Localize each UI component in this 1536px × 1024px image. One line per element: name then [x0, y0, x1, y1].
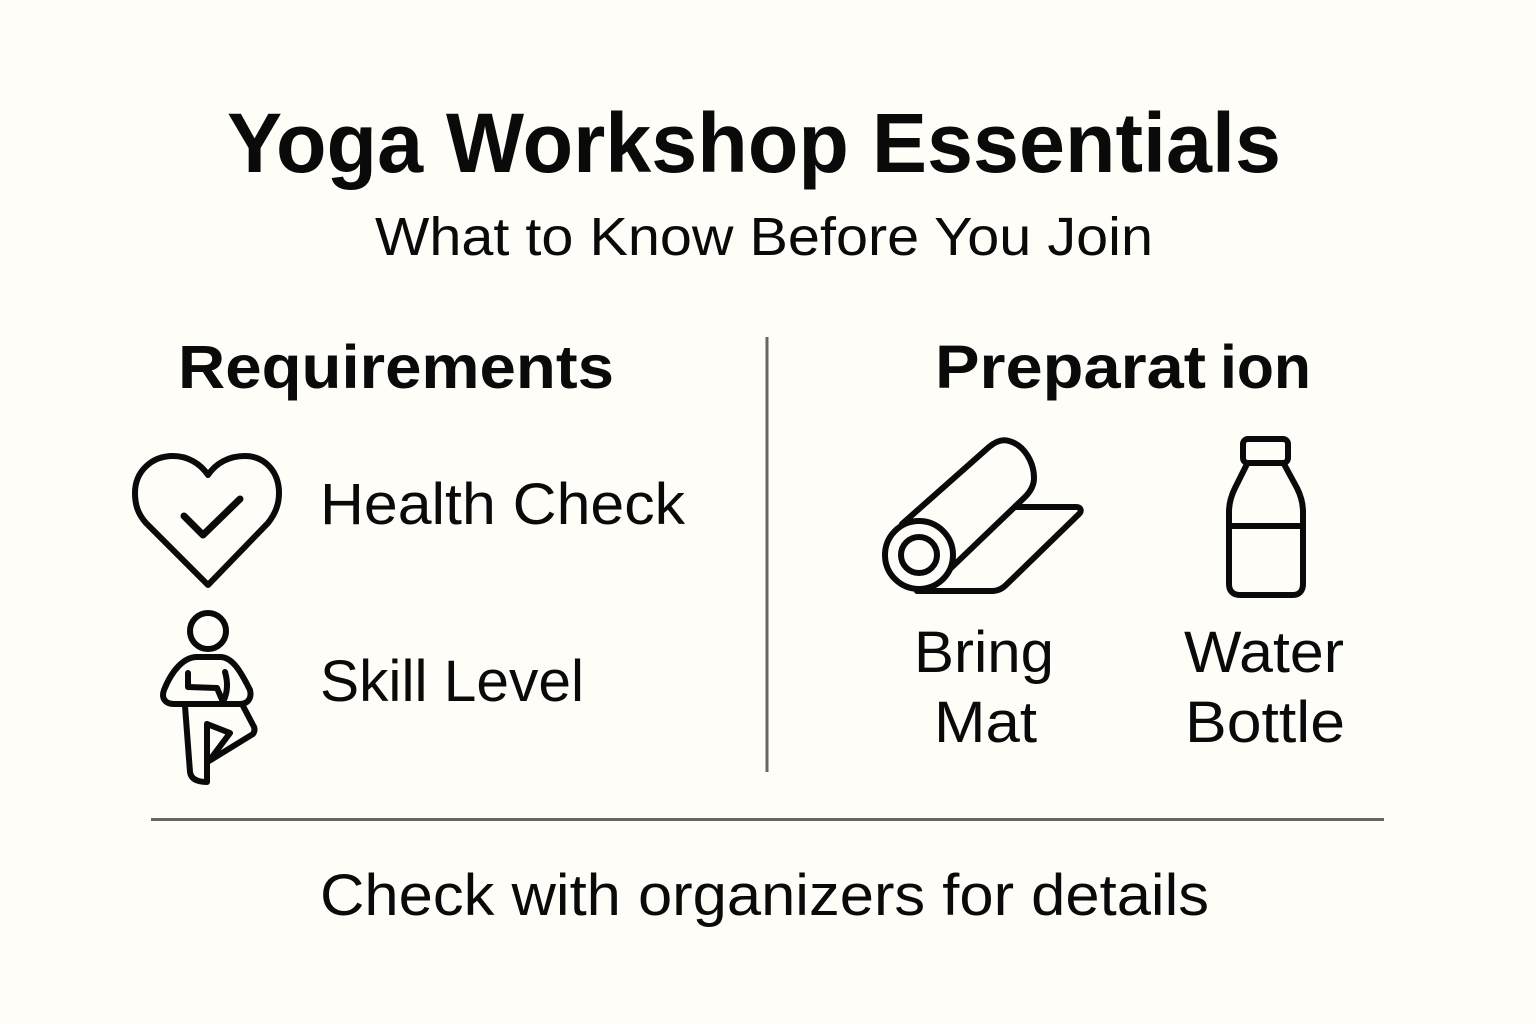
heading: preparation: ion	[1220, 333, 1311, 401]
heading: requirements: Requirements	[178, 333, 614, 401]
icon: heart with check	[135, 456, 279, 585]
label: water bottle	[1184, 620, 1345, 755]
label: bring mat	[914, 620, 1054, 755]
icon: water bottle	[1229, 439, 1303, 595]
label: health check: Health Check	[320, 472, 686, 537]
icon: rolled mat	[885, 440, 1081, 591]
label: water bottle: Bottle	[1185, 690, 1345, 755]
heading: preparation: Preparat	[935, 333, 1206, 401]
label: bring mat: Mat	[934, 690, 1037, 755]
label: water bottle: Water	[1184, 620, 1344, 685]
subtitle: What to Know Before You Join	[375, 207, 1153, 267]
panel: requirements	[135, 333, 686, 782]
icon: tree pose figure	[163, 613, 254, 782]
title: Yoga Workshop Essentials	[227, 96, 1281, 190]
horizontal divider	[151, 818, 1384, 821]
vertical divider	[766, 337, 768, 772]
panel: preparation	[885, 333, 1345, 755]
label: bring mat: Bring	[914, 620, 1054, 685]
label: skill level: Skill Level	[320, 649, 584, 714]
footer note: Check with organizers for details	[320, 863, 1209, 928]
